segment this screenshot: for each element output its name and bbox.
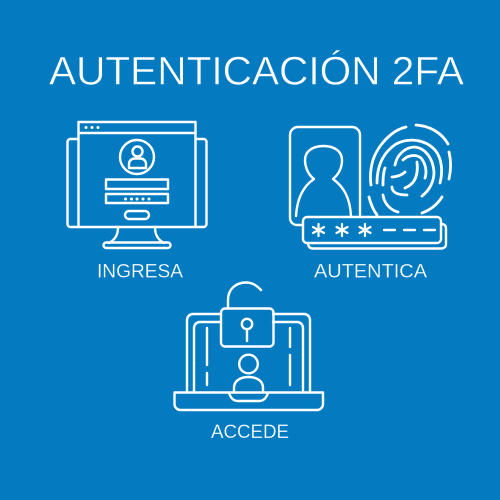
password field [303,217,441,243]
icon: login on desktop monitor [68,122,206,248]
icon: identity, fingerprint and password [290,125,450,248]
label: autentica: AUTENTICA [314,260,427,282]
fingerprint ridges [369,125,450,215]
label: ingresa: INGRESA [97,260,183,282]
title: AUTENTICACIÓN 2FA [49,48,464,94]
label: accede: ACCEDE [211,421,289,443]
icon: laptop with open padlock [174,282,323,410]
